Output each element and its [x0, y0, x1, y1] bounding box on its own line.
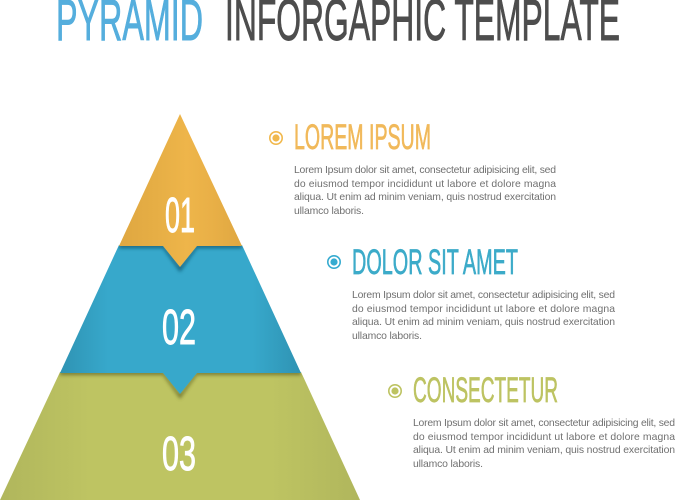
body text 1: [294, 165, 556, 217]
number 02: 02: [162, 301, 196, 355]
body text 2: [352, 290, 615, 342]
heading 1: LOREM IPSUM: [294, 118, 431, 157]
pyramid: [0, 114, 360, 500]
body text 3: aliqua. Ut enim ad minim veniam, quis nostrud exercitation: [413, 445, 675, 456]
body text 3: Lorem Ipsum dolor sit amet, consectetur adipisicing elit, sed: [413, 418, 675, 429]
item 3: consectetur: [389, 371, 675, 470]
body text 1: do eiusmod tempor incididunt ut labore et dolore magna: [294, 179, 556, 190]
body text 1: aliqua. Ut enim ad minim veniam, quis nostrud exercitation: [294, 192, 556, 203]
item 2: dolor sit amet: [328, 243, 615, 342]
tier 3: green: [0, 371, 360, 500]
body text 2: aliqua. Ut enim ad minim veniam, quis nostrud exercitation: [352, 317, 615, 328]
body text 1: Lorem Ipsum dolor sit amet, consectetur adipisicing elit, sed: [294, 165, 556, 176]
body text 3: ullamco laboris.: [413, 459, 483, 470]
body text 3: [413, 418, 675, 470]
tier 2: blue: [60, 244, 301, 394]
body text 2: do eiusmod tempor incididunt ut labore et dolore magna: [352, 304, 615, 315]
title: [56, 0, 620, 53]
heading 2: DOLOR SIT AMET: [352, 243, 518, 282]
body text 3: do eiusmod tempor incididunt ut labore et dolore magna: [413, 432, 675, 443]
bullet 2: [328, 256, 340, 268]
body text 1: ullamco laboris.: [294, 206, 364, 217]
heading 3: CONSECTETUR: [413, 371, 558, 410]
bullet 1: [270, 132, 282, 144]
body text 2: ullamco laboris.: [352, 331, 422, 342]
item 1: lorem ipsum: [270, 118, 556, 217]
tier 1: orange: [119, 114, 242, 267]
bullet 3: [389, 385, 401, 397]
body text 2: Lorem Ipsum dolor sit amet, consectetur adipisicing elit, sed: [352, 290, 615, 301]
number 01: 01: [165, 189, 195, 243]
number 03: 03: [162, 428, 196, 481]
